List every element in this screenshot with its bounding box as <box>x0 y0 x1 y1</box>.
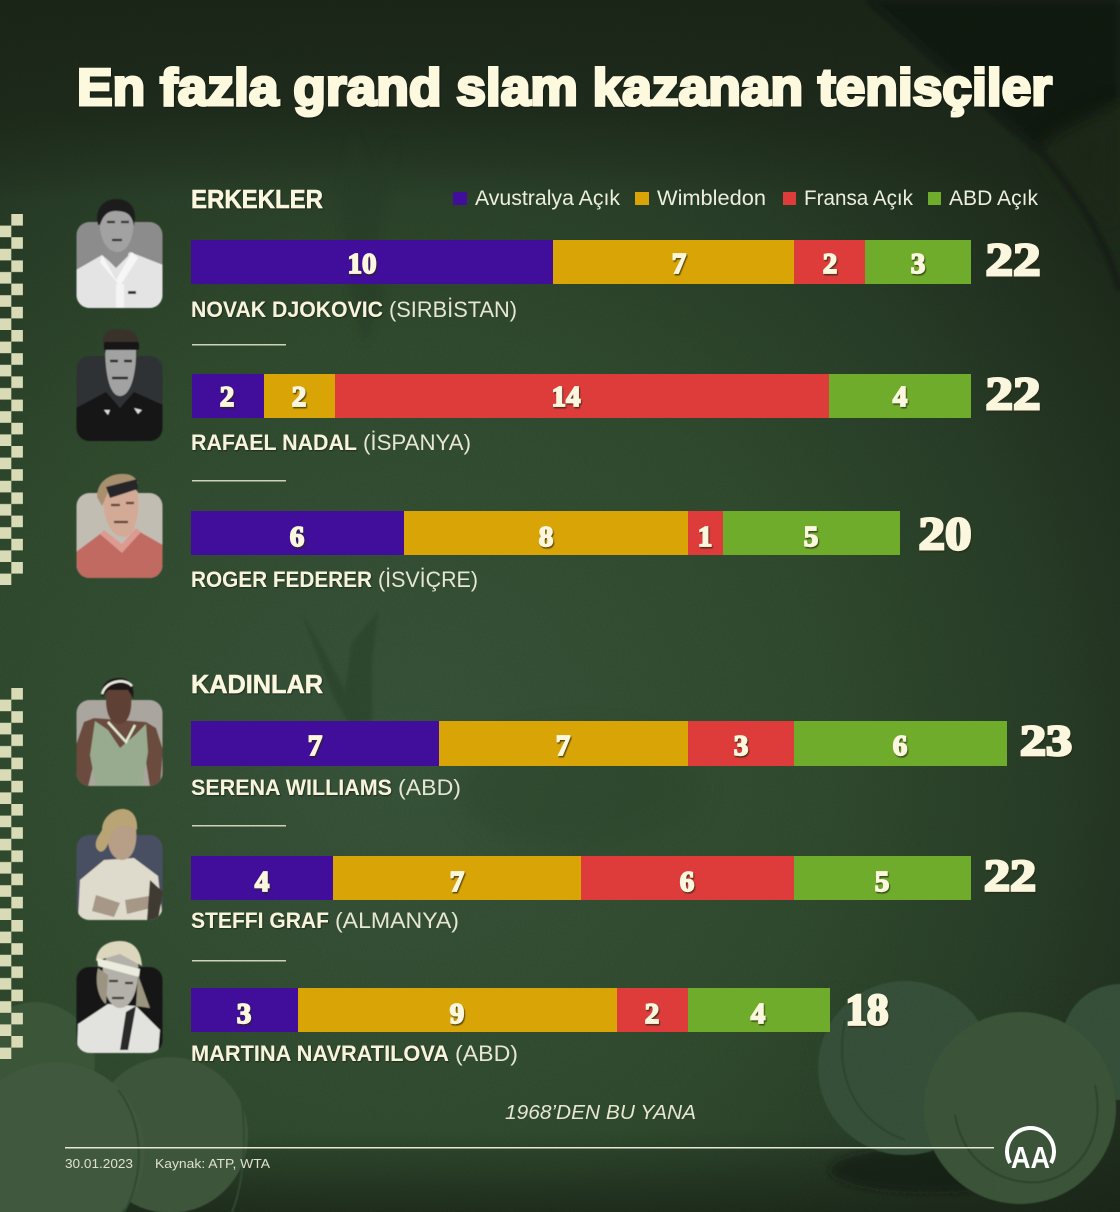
row: Martina Navratilova <box>76 941 888 1066</box>
total: Graf: 22 <box>984 851 1036 900</box>
name: Navratilova: MARTINA NAVRATILOVA <box>191 1041 449 1066</box>
bar: Williams: 3 <box>734 730 748 762</box>
bar: Navratilova: 2 <box>645 998 659 1030</box>
bar: Navratilova: 3 <box>237 998 251 1030</box>
portrait: Navratilova <box>76 941 163 1054</box>
bar: Navratilova: 9 <box>450 998 464 1030</box>
name: Williams: (ABD) <box>398 775 461 800</box>
name: Djokovic <box>191 297 517 322</box>
tennis balls: left <box>0 1002 248 1212</box>
total: Nadal: 22 <box>986 368 1040 420</box>
bar: Graf: 7 <box>450 866 464 898</box>
faint player silhouette: bottom <box>302 612 378 725</box>
bar: Federer: 6 <box>290 521 304 553</box>
row: Rafael Nadal <box>76 329 1040 455</box>
bar: Graf <box>191 856 971 900</box>
bar: Graf: 5 <box>875 866 889 898</box>
bar: Nadal: 14 <box>552 381 580 413</box>
bar: Federer: 8 <box>539 521 553 553</box>
bar: Federer <box>191 511 900 555</box>
bar: Nadal: 4 <box>893 381 907 413</box>
name: Federer: (İSVİÇRE) <box>378 567 478 592</box>
name: Djokovic: NOVAK DJOKOVIC <box>191 297 383 322</box>
name: Graf: (ALMANYA) <box>335 908 459 933</box>
logo: AA: AA <box>1011 1140 1050 1175</box>
name: Nadal: (İSPANYA) <box>363 430 471 455</box>
name: Williams: SERENA WILLIAMS <box>191 775 392 800</box>
legend: Fransa Açık <box>804 187 913 210</box>
total: Navratilova: 18 <box>846 985 888 1034</box>
name: Djokovic: (SIRBİSTAN) <box>389 297 517 322</box>
bar: Federer: 5 <box>804 521 818 553</box>
name: Navratilova: (ABD) <box>455 1041 518 1066</box>
bar: Djokovic: 10 <box>348 248 376 280</box>
checker strip: women <box>0 688 23 1059</box>
row: Roger Federer <box>76 474 972 592</box>
total: Williams: 23 <box>1020 718 1072 765</box>
row: Serena Williams <box>76 678 1072 800</box>
tennis balls: right <box>800 980 1120 1212</box>
name: Nadal: RAFAEL NADAL <box>191 430 357 455</box>
bar: Williams <box>191 721 1007 766</box>
bar: Graf: 4 <box>255 866 269 898</box>
row: Steffi Graf <box>76 809 1036 933</box>
checker strip: men <box>0 214 23 585</box>
bar: Nadal: 2 <box>220 381 234 413</box>
bar: Williams: 6 <box>893 730 907 762</box>
footer: 30.01.2023 <box>65 1156 133 1171</box>
bar: Djokovic: 3 <box>911 248 925 280</box>
bar: Navratilova: 4 <box>751 998 765 1030</box>
total: Djokovic: 22 <box>986 234 1040 286</box>
bar: Williams: 7 <box>556 730 570 762</box>
bar: Graf: 6 <box>680 866 694 898</box>
portrait: Nadal <box>76 329 163 442</box>
portrait: Williams <box>76 678 163 787</box>
bar: Nadal: 2 <box>292 381 306 413</box>
total: Federer: 20 <box>918 508 972 560</box>
bar: Navratilova <box>191 988 830 1032</box>
footer: Kaynak: ATP, WTA <box>155 1156 270 1171</box>
heading: KADINLAR: KADINLAR <box>191 669 323 699</box>
bar: Djokovic: 7 <box>672 248 686 280</box>
row: Novak Djokovic <box>76 199 1040 322</box>
bar: Nadal <box>192 374 971 418</box>
name: Graf <box>191 908 459 933</box>
legend <box>453 187 1038 210</box>
logo: AA <box>1007 1128 1054 1175</box>
bar: Djokovic: 2 <box>823 248 837 280</box>
note: since 1968: 1968’DEN BU YANA <box>505 1102 696 1124</box>
name: Graf: STEFFI GRAF <box>191 908 329 933</box>
legend: Avustralya Açık <box>475 187 620 210</box>
bar: Djokovic <box>191 240 971 284</box>
title: En fazla grand slam kazanan tenisçiler <box>77 59 1052 117</box>
legend: ABD Açık <box>949 187 1038 210</box>
name: Federer: ROGER FEDERER <box>191 567 372 592</box>
name: Federer <box>191 567 478 592</box>
portrait: Federer <box>76 474 163 580</box>
portrait: Djokovic <box>76 199 163 310</box>
bar: Federer: 1 <box>698 521 712 553</box>
bar: Williams: 7 <box>308 730 322 762</box>
portrait: Graf <box>76 809 163 921</box>
footer <box>65 1147 994 1171</box>
name: Nadal <box>191 430 471 455</box>
faint player silhouette: top <box>338 132 396 345</box>
legend: Wimbledon <box>657 187 766 210</box>
heading: ERKEKLER: ERKEKLER <box>191 184 323 214</box>
